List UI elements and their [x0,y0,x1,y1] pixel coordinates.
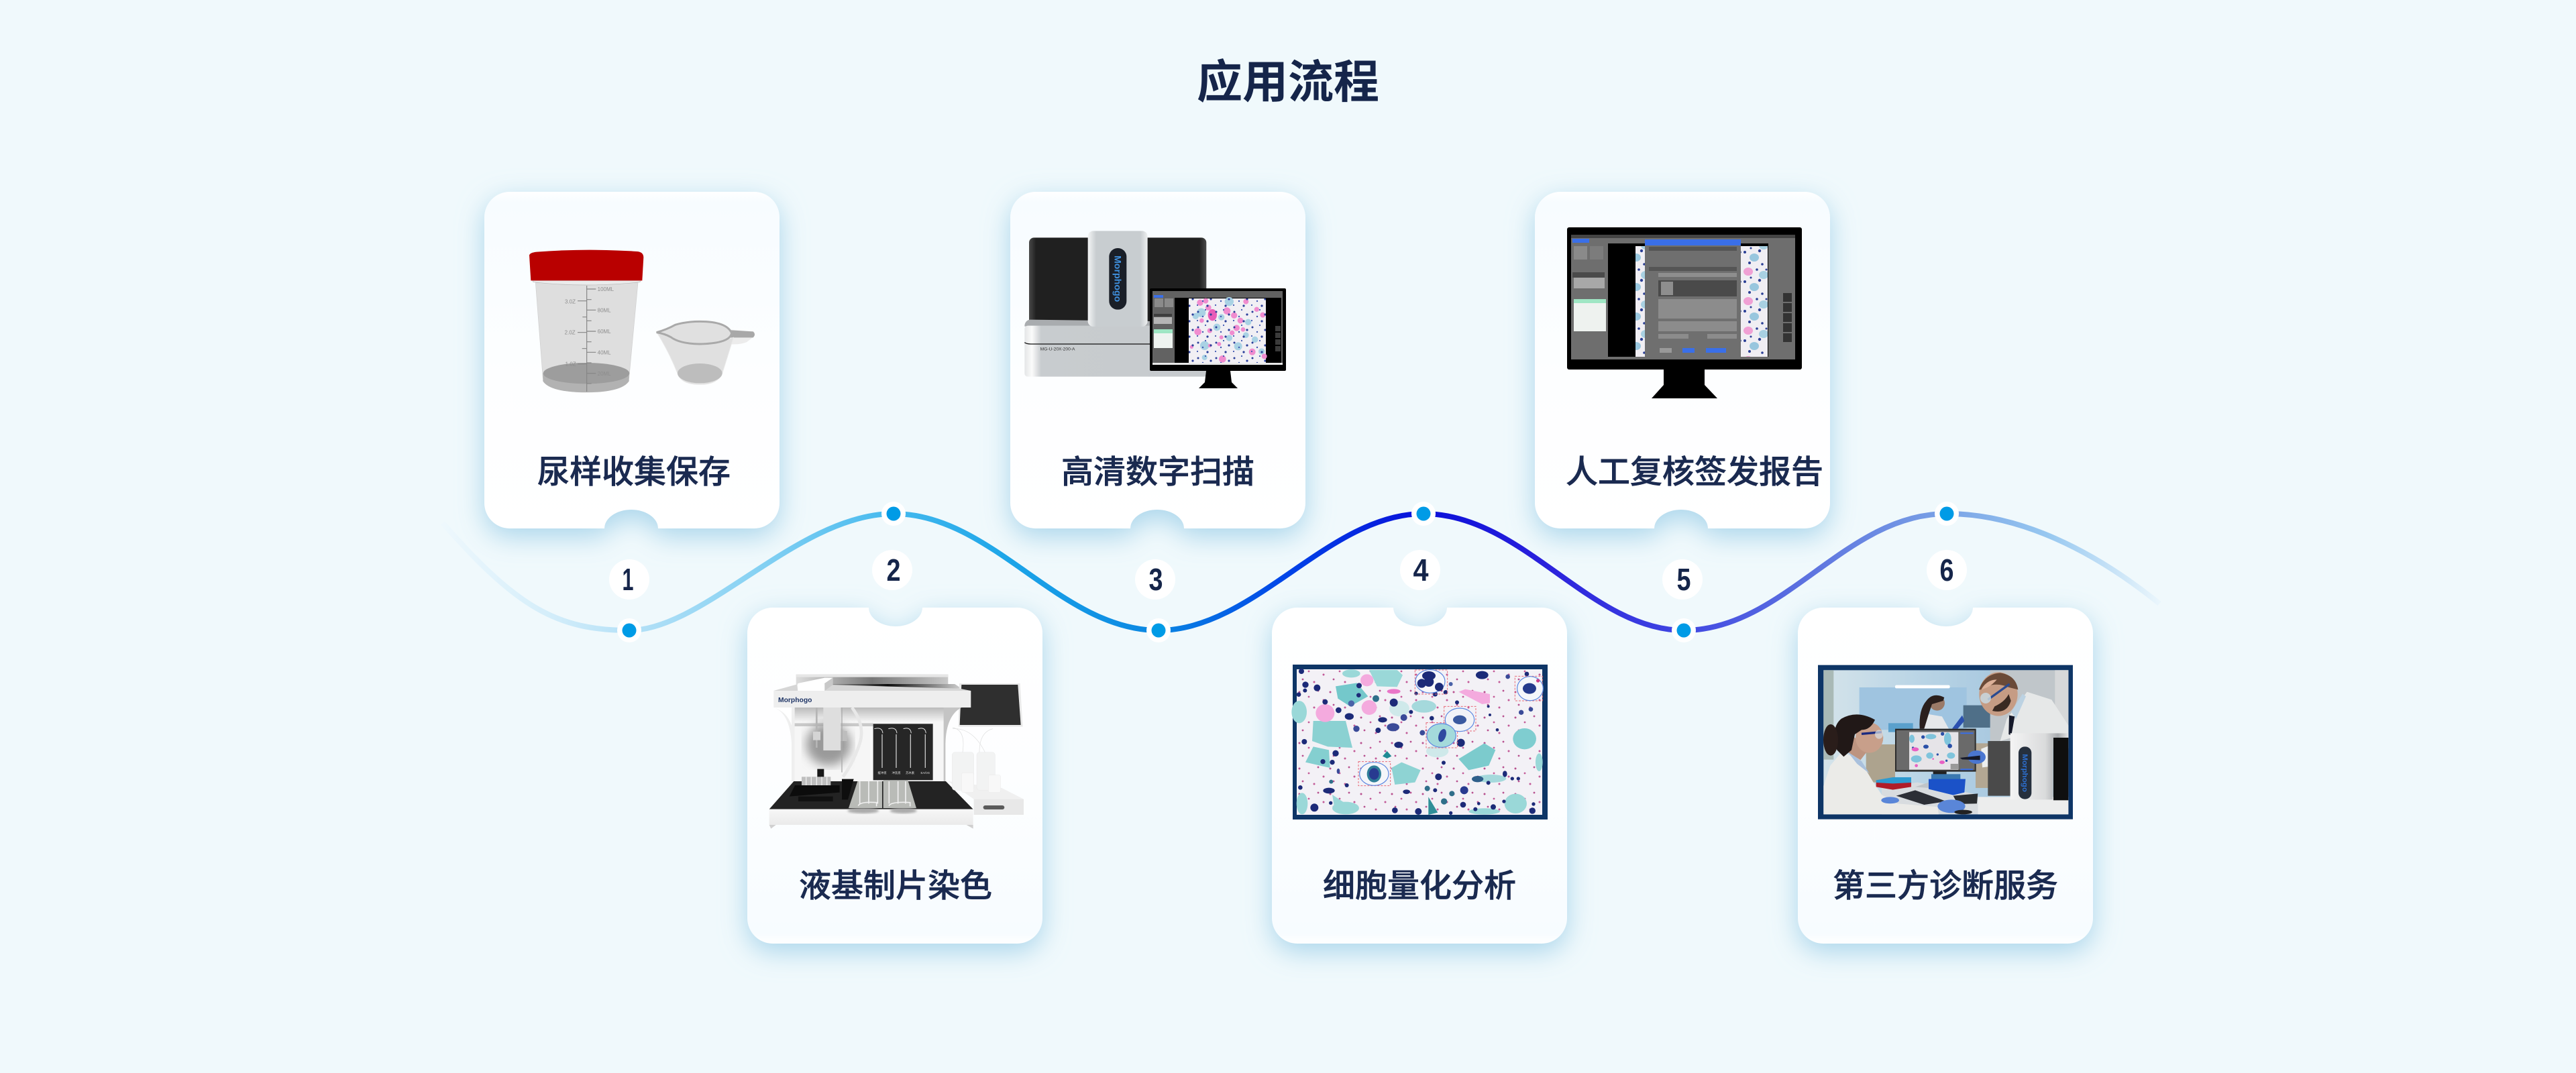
icon: specimen cup: 2.0Z [565,330,576,336]
card 2 label: 液基制片染色 [799,868,992,904]
card 5: manual review and report [1535,192,1830,528]
icon: staining instrument: EA/OG [920,771,930,775]
title: 应用流程 [1197,57,1379,108]
icon: digital scanner: MG-U-20X-200-A [1040,347,1075,351]
number badge 3: 3 [1148,562,1163,597]
card 3 panel [1010,192,1305,528]
icon: specimen cup: 1.0Z [566,361,576,368]
mini scanner [1978,733,2068,814]
icon: specimen cup: 60ML [598,329,611,335]
card 5 panel [1535,192,1830,528]
number badge 4: 4 [1413,553,1429,587]
card 3: HD digital scanning [1010,192,1305,528]
person: seated scientist [1823,714,1978,814]
number badge 1: 1 [623,562,633,597]
card 1: urine sample collection [484,192,780,528]
icon: staining instrument [769,675,1024,829]
card 4: cell quantitative analysis [1272,608,1567,944]
card 4 label: 细胞量化分析 [1323,868,1516,904]
icon: specimen cup: 40ML [598,349,611,355]
card 2 panel [747,608,1042,944]
scanner slide blobs [1190,297,1267,363]
desk monitor [1895,729,1976,778]
number badge 1 [609,559,649,600]
card 6 label: 第三方诊断服务 [1833,868,2058,904]
step marker 5 [1672,618,1696,642]
step marker 3 [1146,618,1171,642]
person: background technician [1919,695,1990,729]
icon: specimen cup: 20ML [598,371,611,377]
step marker 6 [1935,502,1959,526]
icon: collection funnel cup [657,321,755,384]
number badge 2: 2 [887,553,900,587]
icon: specimen cup [529,250,643,392]
number badge 2 [872,550,912,590]
number badge 3 [1135,559,1175,600]
step marker 4 [1411,502,1436,526]
icon: staining instrument: 冲洗液 [892,771,901,775]
icon: scanner monitor [1150,288,1286,388]
icon: review monitor [1567,227,1802,398]
card 2: liquid-based slide staining [747,608,1042,944]
card 3 label: 高清数字扫描 [1061,455,1254,490]
icon: specimen cup: 100ML [598,286,614,292]
card 6: third-party diagnostic service [1798,608,2093,944]
cytology micrograph [1291,665,1548,820]
cells and nuclei [1291,669,1543,815]
card 1 panel [484,192,780,528]
icon: digital scanner [1024,231,1208,377]
icon: specimen cup: 80ML [598,308,611,314]
card 1 label: 尿样收集保存 [537,455,731,490]
number badge 4 [1400,550,1440,590]
icon: staining instrument: 苏木素 [906,771,915,775]
step marker 1 [617,618,641,642]
number badge 6 [1927,550,1967,590]
icon: digital scanner: Morphogo [1113,256,1124,302]
icon: staining instrument: 缓冲液 [877,771,887,775]
lab photo scene [1818,665,2073,820]
number badge 6: 6 [1940,553,1953,587]
card 4 panel [1272,608,1567,944]
number badge 5 [1662,559,1703,600]
person: male scientist [1979,672,2068,767]
icon: staining instrument: Morphogo [778,697,812,704]
desk items [1876,750,1986,814]
card 6 panel [1798,608,2093,944]
icon: specimen cup: 3.0Z [565,299,576,305]
wave connector line [443,514,2159,630]
card 5 label: 人工复核签发报告 [1566,455,1823,490]
mini scanner: Morphogo [2021,754,2029,792]
step marker 2 [881,502,906,526]
number badge 5: 5 [1677,562,1690,597]
